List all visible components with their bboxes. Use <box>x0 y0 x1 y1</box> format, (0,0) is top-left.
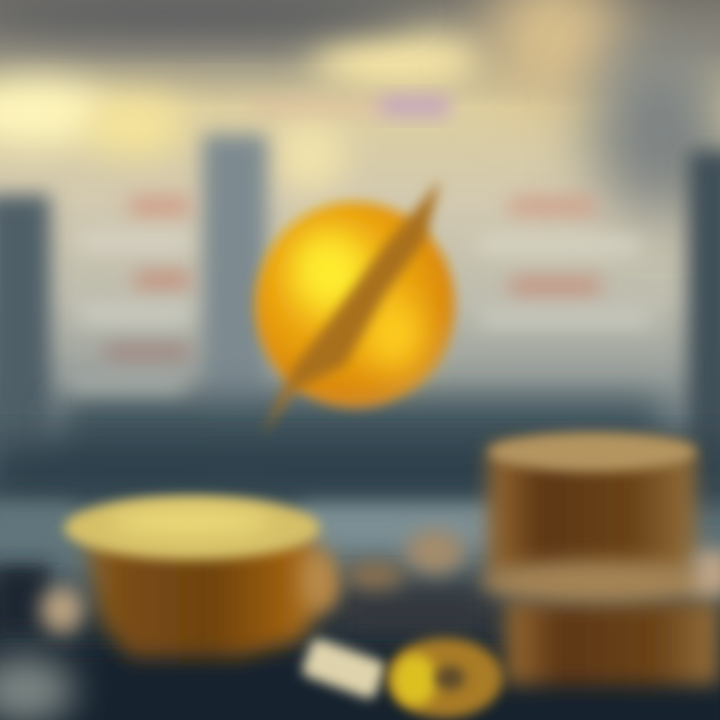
small gold pieces <box>300 530 503 718</box>
icon: golden lightning coin <box>255 180 455 435</box>
blurred text block: left <box>70 198 190 392</box>
coin stack: right <box>480 432 720 685</box>
coin stack: left <box>0 496 338 720</box>
skyline buildings <box>0 135 720 495</box>
ground band <box>0 505 720 720</box>
blurred text block: right <box>480 198 650 326</box>
blurred title text <box>250 96 450 116</box>
